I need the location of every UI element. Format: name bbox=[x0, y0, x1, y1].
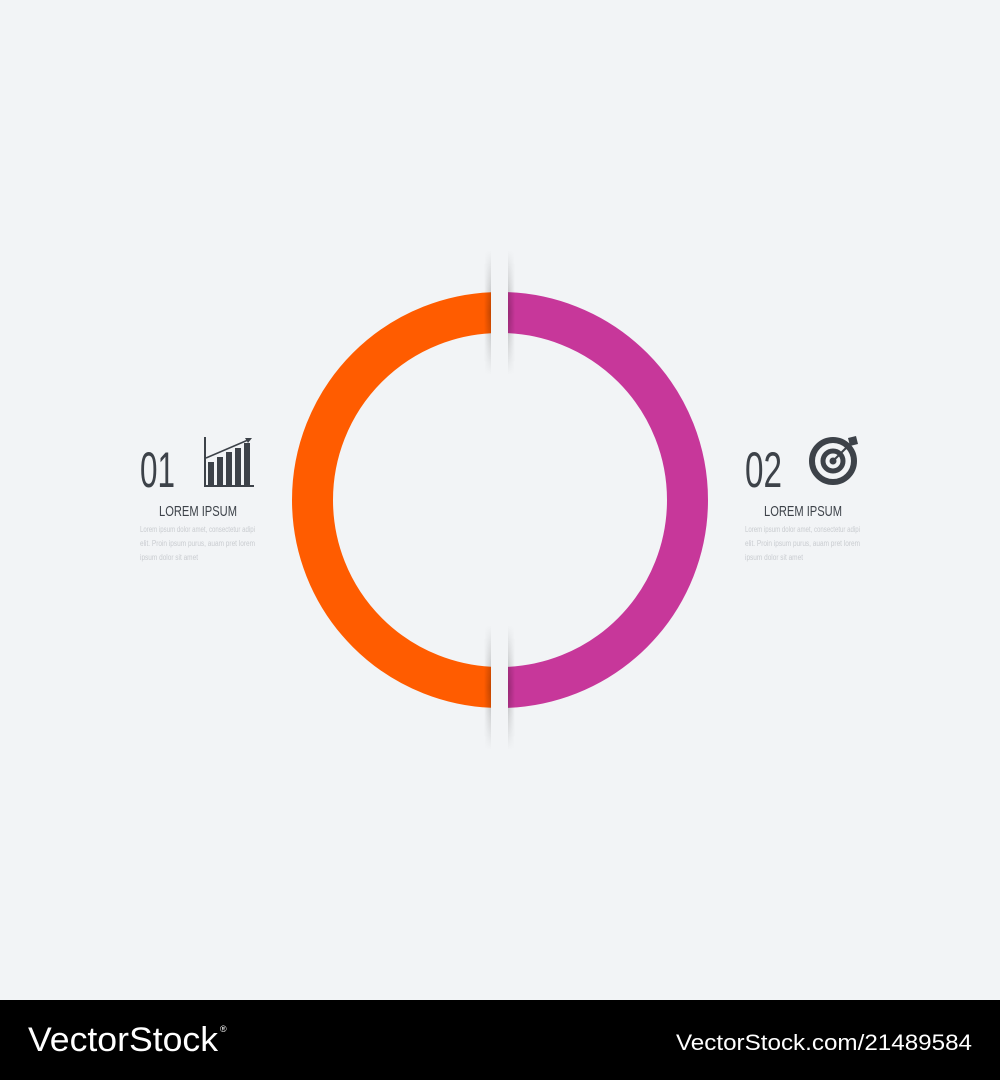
body text: Lorem ipsum dolor amet, consectetur adipi bbox=[745, 525, 860, 534]
body text: Lorem ipsum dolor amet, consectetur adipi bbox=[140, 525, 255, 534]
ring: right magenta half bbox=[508, 292, 708, 708]
body text: elit. Proin ipsum purus, auam pret lorem bbox=[140, 539, 255, 548]
body text bbox=[140, 525, 255, 562]
step 01 block bbox=[140, 437, 255, 562]
icon: target bbox=[812, 436, 858, 482]
number 02: 02 bbox=[745, 442, 782, 498]
body text: ipsum dolor sit amet bbox=[745, 553, 804, 562]
body text: ipsum dolor sit amet bbox=[140, 553, 199, 562]
footer bar: VectorStock.com/21489584 bbox=[676, 1030, 972, 1055]
ring: left orange half bbox=[292, 292, 491, 708]
footer bar: ® bbox=[220, 1024, 227, 1034]
heading: LOREM IPSUM bbox=[159, 503, 237, 520]
step 02 block bbox=[745, 436, 860, 562]
split shadows bbox=[484, 250, 515, 750]
number 01: 01 bbox=[140, 442, 175, 498]
heading: LOREM IPSUM bbox=[764, 503, 842, 520]
icon: bar chart bbox=[204, 437, 254, 487]
footer bar: VectorStock bbox=[28, 1021, 219, 1059]
body text: elit. Proin ipsum purus, auam pret lorem bbox=[745, 539, 860, 548]
footer bar bbox=[0, 1000, 1000, 1080]
body text bbox=[745, 525, 860, 562]
